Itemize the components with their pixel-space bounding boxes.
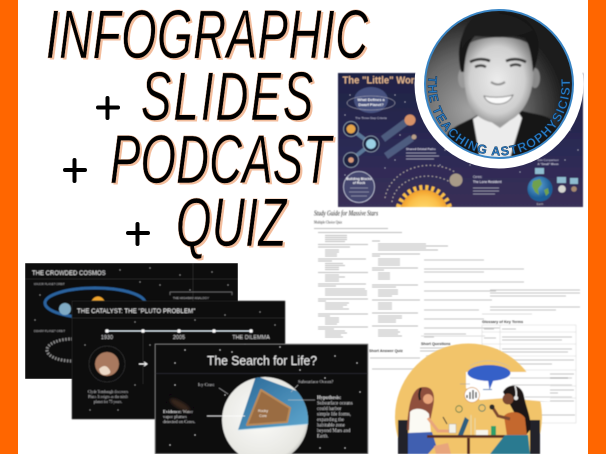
slide 3 heading: The Search for Life? [207,354,317,368]
panel: slide 1 crowded cosmos [25,263,238,379]
timeline [101,329,270,341]
title shadow: PODCAST [112,123,336,200]
text: dwarf moons [537,158,559,166]
label: hypothesis: expanding the [317,418,344,423]
icon: ceres [450,174,462,186]
slide 1 stars [35,268,228,320]
pluto caption: Clyde Tombaugh discovers [88,390,129,394]
solar orbit [45,288,145,318]
label: evidence: vapor plumes [163,414,187,419]
title shadow [48,0,371,263]
text: shared orbital paths [406,147,439,159]
icon: earth: Earth [537,202,544,206]
suit [446,110,556,156]
portrait photo [425,10,573,160]
panel: infographic preview [337,72,584,208]
slide 1 labels: MAJOR PLANET ORBIT [34,282,65,286]
timeline: 1930 [101,335,113,341]
glossary table [482,325,576,423]
label: hypothesis [317,396,353,440]
text: ceres: The Lone Resident [473,180,502,184]
icons: reaction bubbles [456,406,462,412]
title: infographic slides podcast quiz [46,0,369,261]
icon: microphone bubble [464,388,480,402]
title: infographic slides podcast quiz: PODCAST [110,122,334,198]
callout: building blocks of rock: Building Blocks [346,177,372,181]
left orange bar [0,0,18,454]
title shadow: INFOGRAPHIC [48,0,371,75]
text: ceres [473,175,502,194]
neck [492,120,510,128]
badge text: THE TEACHING ASTROPHYSICIST [428,76,570,156]
yellow backdrop [395,343,542,454]
label: evidence [163,409,195,424]
three-step criteria diagram: The Three-Step Criteria [355,116,387,120]
glossary heading: Glossary of Key Terms [482,320,523,324]
label: icy crust: Icy Crust [198,382,215,387]
label: hypothesis: Earth. [317,434,329,440]
three-step criteria diagram [344,114,416,168]
label: evidence: detected on Ceres. [163,419,195,424]
infographic heading: The "Little" Wor [342,76,415,86]
ceres cutaway [222,376,310,454]
text: ceres: Ceres: [473,175,483,179]
panel: slide 2 pluto problem [72,301,285,419]
desk and props [427,415,514,454]
shirt [473,112,522,158]
right orange bar [588,0,606,454]
slide 2 stars [85,312,275,410]
label: hypothesis: could harbor [317,407,342,412]
title shadow: SLIDES [143,60,315,137]
label: hypothesis: simple life forms, [317,412,351,418]
icon: dwarf planet globe [347,87,395,113]
label: hypothesis: habitable zone [317,424,345,428]
label: hypothesis: Subsurface oceans [317,402,353,406]
ceres cutaway: Core [259,414,267,418]
label: hypothesis: Hypothesis: [317,396,342,401]
mouth [484,95,513,104]
face [464,37,534,123]
nose [491,82,505,84]
icon: dwarf planet globe: What Defines a [357,98,385,102]
author badge [414,9,584,168]
podcast illustration [395,343,572,454]
short answer heading: Short Questions [421,342,451,346]
slide 1 heading: THE CROWDED COSMOS [32,271,106,277]
right podcaster [489,386,540,454]
pluto caption [88,390,129,404]
eyes [475,64,521,67]
slide 3 stars [170,347,360,448]
document heading: Study Guide for Massive Stars [314,210,378,218]
blue ring [424,9,574,159]
pluto caption: planet for 75 years. [94,400,122,404]
speech bubble [468,361,510,390]
label: subsurface ocean: Subsurface Ocean? [298,379,333,384]
panel: study guide document [314,210,580,423]
glossary lines over backdrop [460,372,572,397]
icon: earth [528,176,552,206]
white document overlap [466,372,550,402]
panel: slide 3 search for life [155,344,368,454]
panel: slide 1 crowded cosmos: DWARF PLANET ORBIT [34,329,65,333]
icon: sun [395,184,453,208]
callout: building blocks of rock [344,172,374,202]
eyebrows [470,59,526,62]
hair [458,34,538,73]
icon: pluto [89,346,125,382]
icons: moons [535,168,578,193]
dwarf orbit [44,336,72,364]
ceres cutaway: Rocky [258,409,268,413]
pluto caption: Pluto. It reigns as the ninth [88,395,128,399]
callout: building blocks of rock: of Rock [353,181,365,185]
arrow [139,362,147,366]
title: infographic slides podcast quiz: QUIZ [176,185,288,261]
timeline: 2005 [173,335,185,341]
text: dwarf moons: Size Comparison [537,158,559,162]
title shadow: QUIZ [178,186,290,263]
white badge ring [414,0,584,168]
icon: dwarf planet globe: Dwarf Planet? [358,103,384,107]
document text lines [314,228,402,337]
asteroid belt [385,165,455,202]
nebula blur [168,396,192,414]
label: evidence: Evidence: Water [163,409,193,414]
ears [458,70,465,88]
label: hypothesis: beyond Mars and [317,429,351,434]
timeline: THE DILEMMA [232,335,270,341]
slide 2 heading: THE CATALYST: THE "PLUTO PROBLEM" [77,308,195,315]
left podcaster [398,387,452,454]
essay heading: Short Answer Quiz [369,349,403,353]
document subheading: Multiple Choice Quiz [314,220,342,224]
infographic stars [345,95,578,175]
panel: slide 1 crowded cosmos: THE HIGHWAY ANALOGY [173,296,209,300]
title: infographic slides podcast quiz: SLIDES [141,59,313,135]
text: dwarf moons: A "Small" Moon [537,162,559,166]
text: shared orbital paths: Shared Orbital Paths [406,147,436,151]
